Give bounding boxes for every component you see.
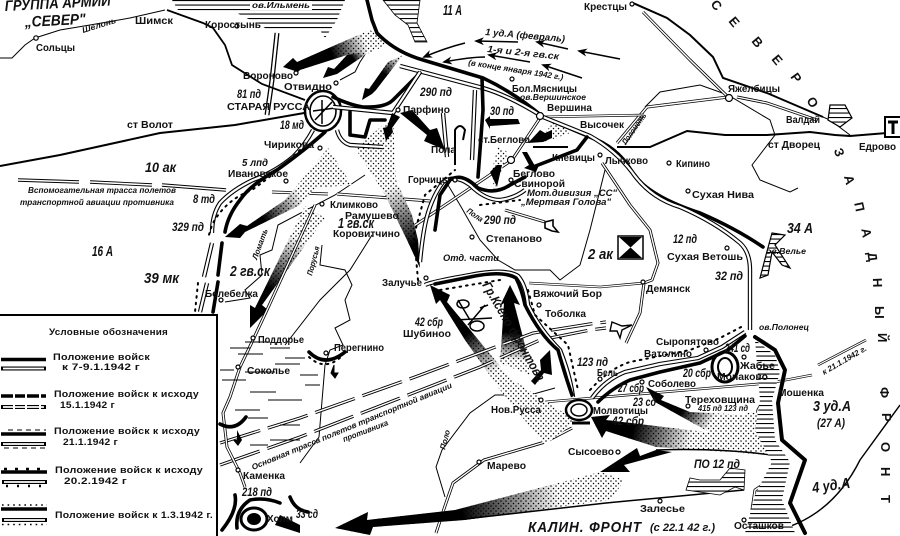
labels: places north-east: ов.Велье [766,247,807,256]
arrow: to Molvotitsy from the east [591,412,772,455]
arrow: southward to Staraya Russa front [362,55,403,100]
labels: North-West Front letters: З [831,146,848,159]
labels: places north-east: Сухая Нива [692,189,754,201]
labels: places north-east: Яжелбицы [728,83,780,95]
labels: places south: Осташков [734,520,785,532]
transport planes in the pocket [455,300,492,331]
front line: west segments [195,243,222,312]
front line: Knevitsy [533,137,587,167]
labels: places north-east: 290 пд [483,213,516,227]
labels: places south: Вяжочий Бор [533,288,602,300]
legend row: 21.1.1942: 21.1.1942 г [63,437,118,448]
labels: places north-east: 32 пд [715,269,743,283]
lake Velye [760,233,790,278]
labels: North-West Front letters: Р [788,70,805,86]
labels: places north-west: Залучье [382,277,422,289]
labels: North-West Front letters: Д [864,251,881,263]
legend row: 15.1.1942: Положение войск к исходу [54,389,200,400]
labels: places south: Бель [597,367,618,379]
labels: places north-east: Пола [465,206,485,224]
labels: places north-west: 16 А [92,243,113,260]
labels: North-West Front letters: О [878,442,893,452]
labels: places south: Молвотицы [593,405,648,417]
labels: places north-east: Пола [431,144,456,156]
labels: places south: КАЛИН. ФРОНТ [528,519,643,536]
railway: Volot line [0,112,310,166]
labels: places south: Поддорье [258,334,304,346]
labels: North-West Front letters: Т [878,495,893,503]
labels: North-West Front letters [708,0,894,503]
labels: places north-east: 1-я и 2-я гв.ск [487,44,561,63]
labels: places north-west: Отвидно [284,81,332,93]
arrow: long to Kholm [335,450,771,535]
legend row: 15.1.1942 [1,389,200,411]
railway: Shimsk line [167,10,305,100]
labels: North-West Front letters: В [749,34,766,51]
labels: places north-east: ст Дворец [768,139,821,151]
labels: places south: Каменка [243,470,285,482]
labels: places north-east: 290 пд [419,85,452,99]
labels: places north-west: 18 мд [280,118,304,132]
road: Poddorye to Kamenka [223,205,315,487]
arrow: north to Demyansk pocket [500,285,530,375]
labels: places south: 27 сбр [617,381,644,395]
labels: places south: Марево [487,460,526,472]
front line: north corridor [443,78,483,177]
labels: places south [241,279,868,536]
labels: places north-west: 5 лпд [242,158,268,169]
labels: places south: Тереховщина [685,394,755,406]
labels: places north-west: Вороново [243,70,293,82]
labels: North-West Front letters: Ы [872,306,887,319]
labels: places north-east: Бол.Мясницы [512,83,577,95]
front line: west double [212,130,313,233]
front line: pocket north [414,170,525,280]
arrow: Beglovo to south [490,147,508,190]
labels: places north-east: Кневицы [552,152,595,164]
front line: west thick [225,132,325,232]
lakes and hatch south-east [686,340,795,533]
Monakovo encirclement [712,352,738,382]
labels: places south: Тоболка [545,308,586,320]
labels: places north-east: Едрово [859,141,896,153]
labels: places south: Жабье [739,360,775,372]
marsh hatching [220,342,320,445]
labels: North-West Front letters: А [841,173,858,187]
labels: places north-east: Кипино [676,158,710,170]
labels: places south: ПО 12 пд [694,457,740,471]
arrow: to Sysoevo southwest [600,448,672,472]
legend row: 20.2.1942: Положение войск к исходу [55,465,204,476]
attack arrows north: 1st Shock Army [424,41,620,78]
flight corridor lines [220,322,606,465]
labels: places north-east: 1 уд.А (февраль) [485,27,565,45]
front line: bulge south of Staraya Russa [333,72,420,147]
legend row: 7-9.1.1942: к 7-9.1.1942 г [62,362,140,373]
labels: places north-east: Валдай [786,114,820,126]
labels: places north-west: транспортной авиации противника [20,198,175,207]
arrow: Knevitsy [522,152,540,172]
legend row: 20.2.1942 [1,465,204,487]
legend row: 15.1.1942: 15.1.1942 г [60,400,115,411]
labels: places north-east: Высочек [580,119,625,131]
labels: places south: Основная трасса полетов транспортной авиации [250,381,453,472]
labels: places south: 241 сд [724,341,750,355]
labels: North-West Front letters: Н [878,467,893,476]
labels: places north-east: 34 А [787,220,813,237]
railway: Lychkovo to Edrovo [617,131,900,147]
arrow: Vershina to Beglovo [528,120,570,147]
arrow: to Zaluchye from Molvotitsy [430,285,575,445]
labels: places north-west: 1 гв.ск [338,215,375,232]
labels: North-West Front letters: Е [726,14,743,30]
arrow: southwest to 2nd Guards corps [225,148,352,238]
labels: places south: 415 пд 123 пд [697,404,748,413]
labels: places north-west: Порусья [305,245,322,277]
labels: places north-west: Климково [330,199,378,211]
lake Valdai [828,105,852,127]
labels: places north-east: Лычково [605,155,648,167]
labels: places north-west: Шелонь [81,16,117,35]
labels: places south: 123 пд [577,355,608,369]
front line: east [755,337,805,533]
labels: places north-east: „Мертвая Голова" [520,197,612,207]
legend row: 20.2.1942: 20.2.1942 г [64,476,127,487]
legend row: 7-9.1.1942: Положение войск [53,352,150,363]
labels: North-West Front letters: Н [870,278,885,288]
labels: places south: Сыропятово [656,336,719,348]
legend row: 7-9.1.1942 [1,352,150,373]
labels: places north-west: 81 пд [237,87,261,101]
labels: places north-east: 11 А [443,2,462,19]
labels: places south: Холм [267,513,293,525]
legend row: 21.1.1942 [1,426,201,448]
front line: west dots [208,150,300,238]
labels: places north-east: 12 пд [673,232,697,246]
labels: places south: 3 уд.А [813,398,851,415]
labels: places north-east: Мот.дивизия „СС" [527,188,618,198]
labels: places north-east: Крестцы [584,1,627,13]
labels: places north-west: Ивановское [228,168,288,180]
labels: North-West Front letters: Р [879,413,894,422]
labels: places north-west: 329 пд [172,220,204,234]
labels: places south: Соколье [247,365,290,377]
labels: places south: Монаково [717,371,768,383]
labels: places north-east: Сухая Ветошь [667,251,744,263]
labels: places south: Нов.Русса [491,404,541,416]
labels: places south: Поло [438,429,452,451]
front line: Staraya Russa ring [305,91,341,131]
arrow: small in pocket [531,350,552,385]
labels: places south: Ватолино [644,348,692,360]
Kholm encirclement [222,495,308,533]
labels: places south: Демянск [646,283,691,295]
airplane: Tobolka corridor [610,322,632,338]
labels: places south: Перегнино [334,342,384,354]
labels: places south: 42 сбр [611,414,644,428]
labels: North-West Front letters: Й [875,333,890,342]
Molvotitsy ring [566,400,592,423]
labels: places north-west: Сольцы [36,42,75,54]
labels: places south: 33 сд [296,507,318,521]
arrow: Terekhovshchina [646,387,750,432]
front line: Molvotitsy to Polonets [590,325,745,402]
icon: 2nd corps flag [618,236,643,259]
labels: places north-west: Белебелка [205,288,258,300]
labels: places north-west: Ломать [250,227,270,262]
labels: places south: (27 А) [817,416,845,430]
labels: places north-east: 2 ак [587,246,614,263]
labels: places south: 23 сд [632,395,656,409]
labels: places north-west: ов.Ильмень [252,1,310,10]
labels: places north-east: Свинорой [514,178,565,190]
labels: places north-east: ст.Беглово [478,134,530,146]
labels: places north-east: Вершина [547,102,592,114]
labels: places south: ов.Полонец [759,323,809,332]
front line: north double [400,66,750,330]
labels: places north-east: Степаново [486,233,542,245]
legend row: 21.1.1942: Положение войск к исходу [54,426,201,437]
panel: legend [0,315,217,536]
labels: places south: Мошенка [778,387,824,399]
labels: places north-west: Шимск [135,15,174,27]
labels: places north-east: Парфино [403,104,450,116]
labels: North-West Front letters: П [851,201,868,213]
labels: places south: Сысоево [568,446,614,458]
labels: places north-west: 39 мк [144,270,180,287]
arrow: Parfino to Pola [400,110,445,150]
labels: places south: 218 пд [241,485,272,499]
arrow: to Otvidno [323,50,372,78]
labels: places north-east: ов.Вершинское [520,93,587,102]
airplane: Stepanovo [505,210,558,232]
labels: places north-east: Полометь [620,111,648,146]
labels: places south: 4 уд.А [810,475,851,497]
front line: pocket south [425,272,578,397]
labels: North-West Front letters: О [804,94,822,110]
legend row: 1.3.1942: Положение войск к 1.3.1942 г. [55,510,213,521]
labels: places north-west: Чирикова [264,139,314,151]
arrow: to Voronovo [283,30,390,72]
lake Ilmen [172,0,427,42]
labels: places north-east: (в конце января 1942 г.) [468,58,564,82]
labels: North-West Front letters: А [858,227,875,239]
Kamenka salient [220,417,246,446]
railway: Kresttsy to Valdai [633,3,823,117]
arrow: large to Zaluchye [355,117,420,268]
small arrow at 30 pd [485,116,520,129]
labels: places north-west: 2 гв.ск [229,263,271,280]
labels: places north-west: 10 ак [145,159,177,175]
labels: places north-west: Горчицы [408,174,450,186]
labels: North-West Front letters: Е [769,52,786,68]
labels: places south: Шубиноо [403,328,451,340]
labels: places north-west: СТАРАЯ РУССА [227,101,310,113]
labels: places south: 42 сбр [414,315,443,329]
labels: places south: 20 сбр [682,366,711,380]
labels: places north-west: Рамушево [345,210,399,222]
labels: places south: (с 22.1 42 г.) [650,522,715,534]
labels: places north-west: 8 тд [193,192,215,206]
labels: places north-west: Коростынь [205,19,262,31]
icon: Edrovo box [885,117,900,137]
front line: north thick [367,0,763,247]
labels: places north-east: Беглово [513,168,555,180]
settlement markers [34,2,746,522]
labels: places south: Гр.Ксено фронтова [479,279,548,383]
arrow: south to Poddorye [250,206,325,328]
labels: North-West Front letters: Ф [877,387,892,398]
Peregnino salient [309,352,345,378]
labels: places north-west: Вспомогательная трасса полетов [28,186,176,195]
labels: places north-west: „СЕВЕР" [23,11,87,31]
labels: places south: к 21.1.1942 г. [820,344,868,377]
labels: places north-east [403,1,896,283]
labels: places north-east: 30 пд [490,104,514,118]
labels: places south: противника [341,418,390,444]
labels: places north-west: ст Волот [127,119,173,131]
legend title: Условные обозначения [49,327,168,338]
labels: places south: Соболево [648,378,696,390]
labels: places south: Залесье [640,503,685,515]
labels: places north-west [4,0,450,300]
labels: places north-west: Коровитчино [333,228,400,240]
labels: places north-east: Отд. части [443,253,500,263]
